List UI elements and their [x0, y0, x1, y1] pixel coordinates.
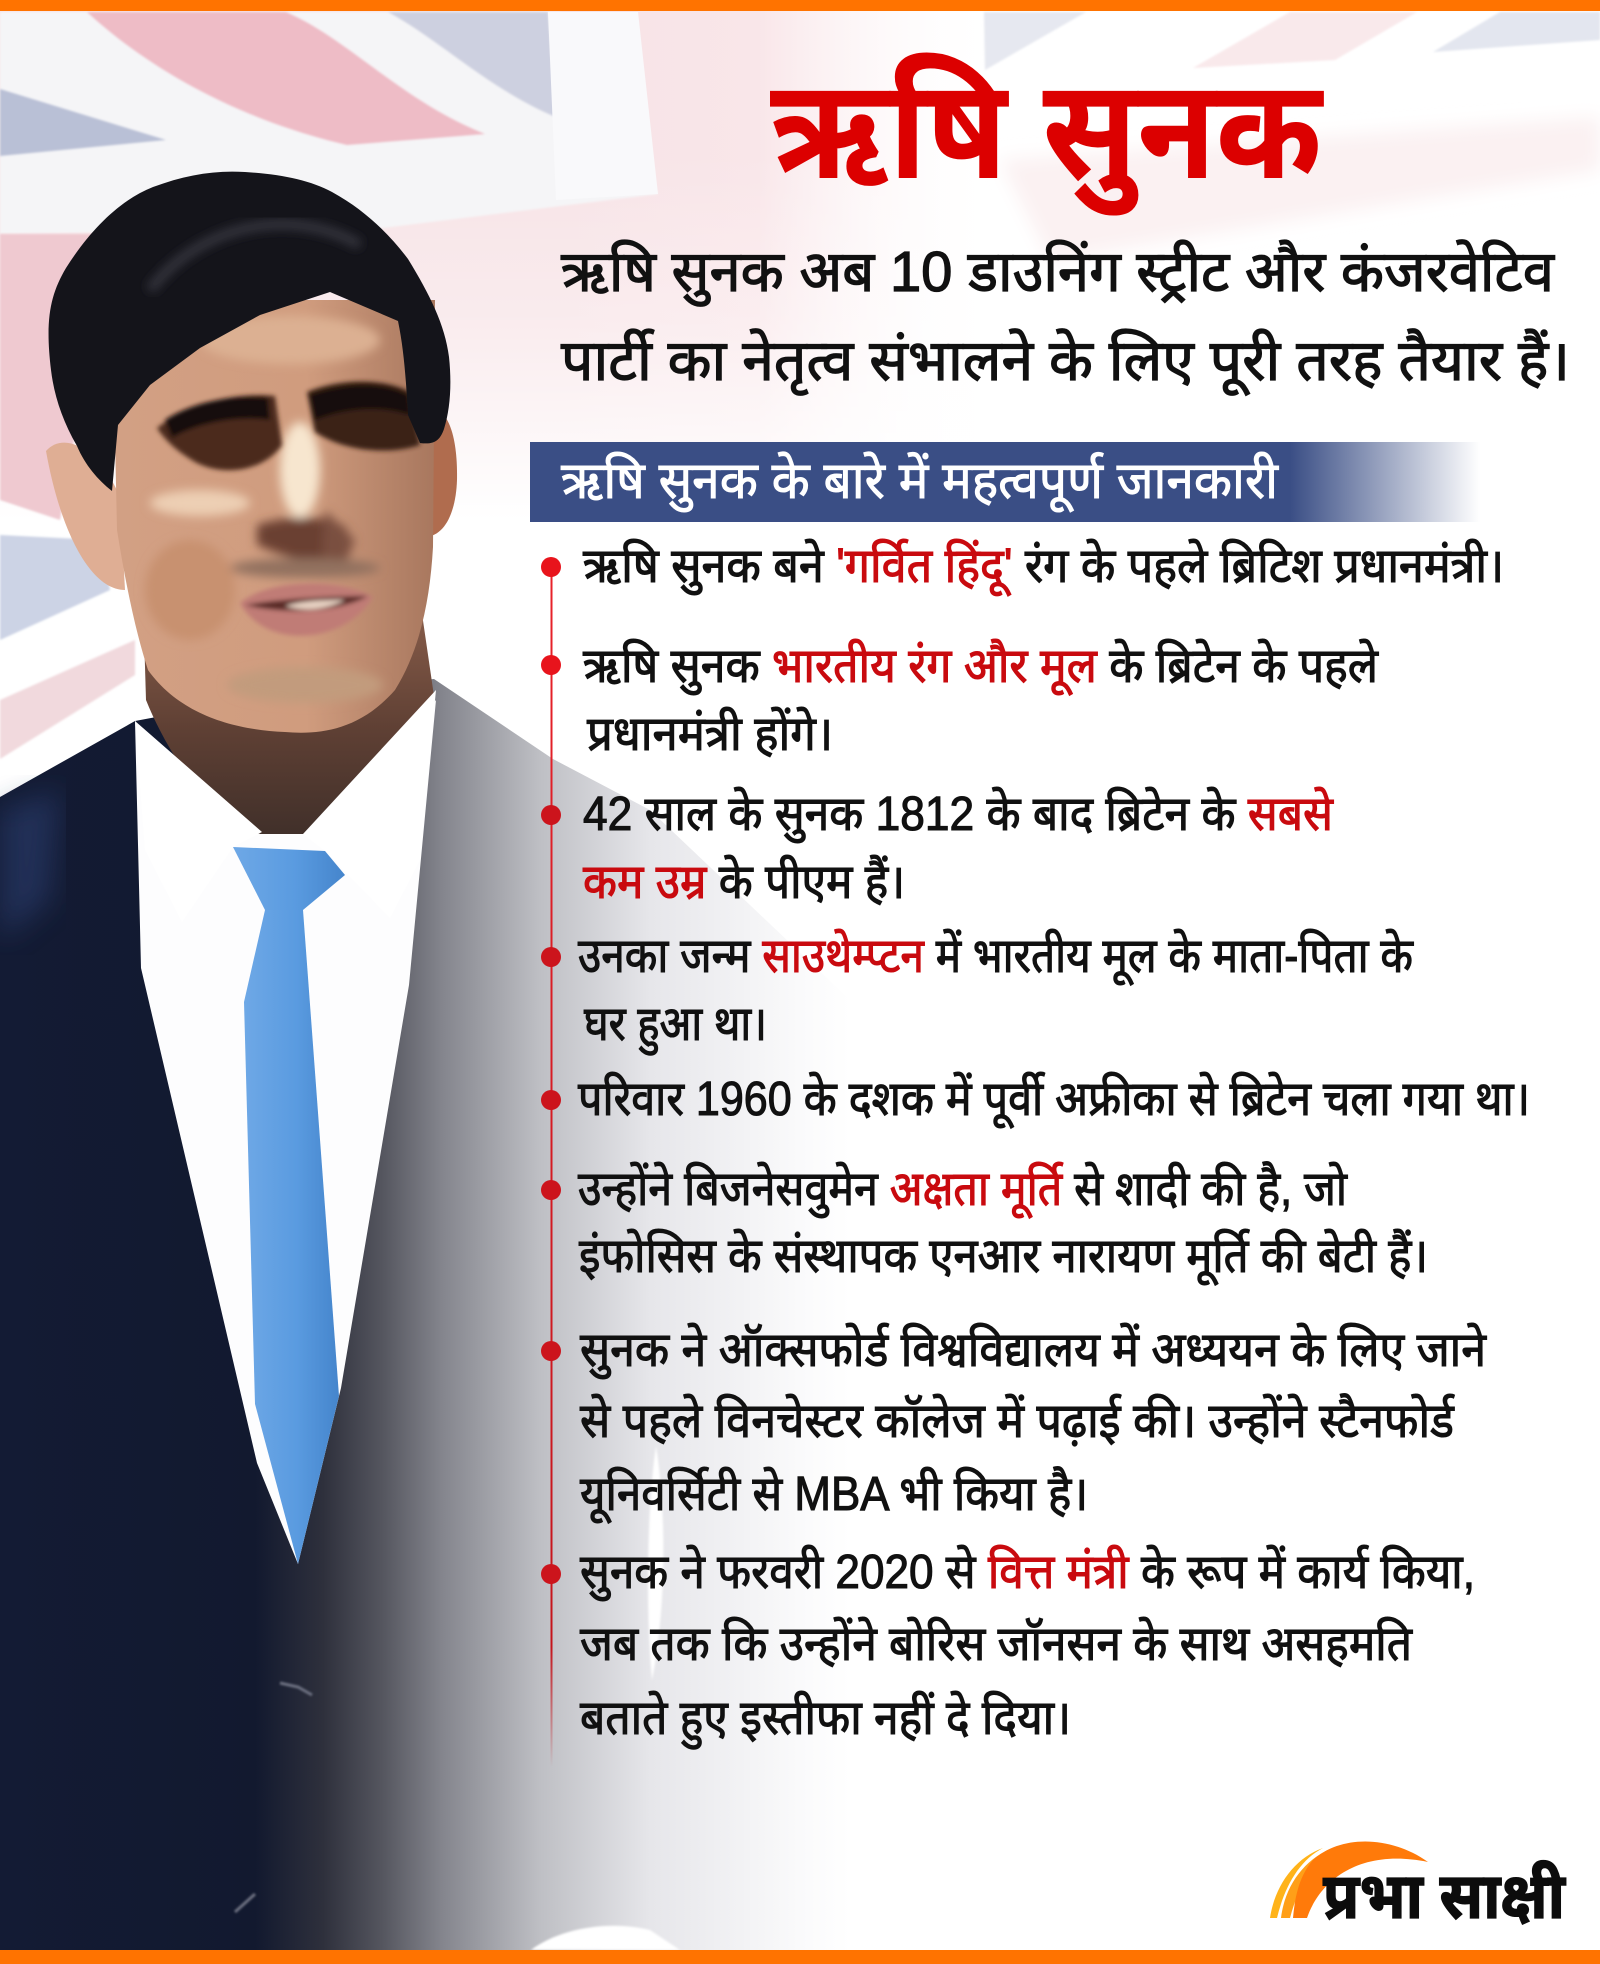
person: photo illustration [0, 172, 850, 1950]
item 2: प्रधानमंत्री होंगे। [587, 706, 833, 761]
item 6: उन्होंने बिजनेसवुमेन अक्षता मूर्ति से शादी की है, जो [578, 1161, 1348, 1219]
hair highlight [150, 224, 360, 290]
item 4 [541, 928, 1414, 1056]
mouth [240, 583, 373, 636]
subtitle: पार्टी का नेतृत्व संभालने के लिए पूरी तरह तैयार हैं। [561, 328, 1570, 397]
eyes and brows [157, 382, 420, 470]
item 1: ऋषि सुनक बने 'गर्वित हिंदू' रंग के पहले ब्रिटिश प्रधानमंत्री। [583, 538, 1504, 597]
shirt [135, 700, 436, 1564]
subtitle [561, 239, 1570, 397]
hair [49, 172, 450, 491]
item 8: बताते हुए इस्तीफा नहीं दे दिया। [580, 1690, 1071, 1750]
item 4: घर हुआ था। [584, 998, 767, 1056]
item 8 [541, 1544, 1475, 1750]
shirt collar [135, 690, 436, 922]
item 8: जब तक कि उन्होंने बोरिस जॉनसन के साथ असहमति [580, 1616, 1414, 1671]
item 7 [541, 1322, 1487, 1524]
white sliver and hand [531, 1446, 680, 1950]
suit jacket [0, 679, 850, 1950]
facial shading [145, 316, 383, 703]
item 3: 42 साल के सुनक 1812 के बाद ब्रिटेन के सबसे [583, 786, 1334, 844]
face [112, 300, 435, 733]
jacket button details [235, 1683, 312, 1912]
item 3 [541, 786, 1334, 909]
item 8: सुनक ने फरवरी 2020 से वित्त मंत्री के रूप में कार्य किया, [580, 1544, 1475, 1602]
item 6: इंफोसिस के संस्थापक एनआर नारायण मूर्ति की बेटी हैं। [579, 1228, 1428, 1286]
bullet list [541, 538, 1530, 1750]
item 2 [541, 638, 1379, 761]
ears [46, 408, 457, 590]
logo arcs [1270, 1841, 1428, 1918]
subtitle: ऋषि सुनक अब 10 डाउनिंग स्ट्रीट और कंजरवेटिव [561, 239, 1555, 307]
top orange bar [0, 0, 1600, 11]
item 7: यूनिवर्सिटी से MBA भी किया है। [580, 1466, 1088, 1524]
suit shoulder highlight [0, 790, 60, 940]
section heading band: ऋषि सुनक के बारे में महत्वपूर्ण जानकारी [561, 451, 1279, 513]
tie [233, 847, 345, 1564]
item 2: ऋषि सुनक भारतीय रंग और मूल के ब्रिटेन के पहले [583, 638, 1379, 696]
item 7: सुनक ने ऑक्सफोर्ड विश्वविद्यालय में अध्ययन के लिए जाने [580, 1322, 1487, 1380]
item 4: उनका जन्म साउथेम्प्टन में भारतीय मूल के माता-पिता के [578, 928, 1414, 986]
neck [143, 600, 434, 834]
title: ऋषि सुनक [770, 51, 1325, 216]
section heading band [530, 442, 1480, 522]
item 7: से पहले विनचेस्टर कॉलेज में पढ़ाई की। उन्होंने स्टैनफोर्ड [580, 1393, 1455, 1448]
bottom orange bar [0, 1950, 1600, 1964]
timeline line [550, 567, 552, 1767]
item 3: कम उम्र के पीएम हैं। [583, 854, 905, 909]
logo wordmark: प्रभा साक्षी [1323, 1860, 1566, 1932]
logo: Prabha Sakshi [1270, 1841, 1566, 1932]
item 6 [541, 1161, 1428, 1286]
